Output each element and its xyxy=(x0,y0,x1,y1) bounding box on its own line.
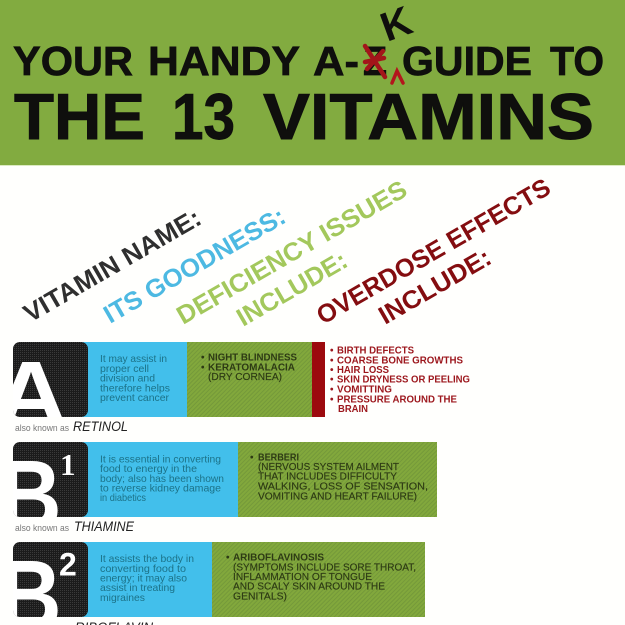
deficiency text B2 xyxy=(226,553,416,603)
heading: overdose include: INCLUDE: xyxy=(374,243,496,330)
letter tile B1: 1 xyxy=(60,447,76,482)
good panel xyxy=(80,442,238,517)
heading: vitamin name: VITAMIN NAME: xyxy=(19,204,206,328)
good text B1 xyxy=(100,454,224,504)
deficiency text B1 xyxy=(250,452,428,502)
title line one: Z xyxy=(363,38,387,84)
deficiency text B1: VOMITING AND HEART FAILURE) xyxy=(258,491,417,502)
heading: deficiency include: INCLUDE: xyxy=(232,246,353,332)
good panel xyxy=(80,542,212,617)
deficiency text B2: (SYMPTOMS INCLUDE SORE THROAT, xyxy=(233,562,416,573)
also known as thiamine xyxy=(15,518,135,534)
good text B1: in diabetics xyxy=(100,493,146,504)
good text A: prevent cancer xyxy=(100,393,170,404)
row: vitamin B1 xyxy=(13,442,437,531)
title line one xyxy=(13,38,604,84)
good text B1: body; also has been shown xyxy=(100,474,224,485)
letter tile B1 xyxy=(13,442,88,517)
also known as retinol: RETINOL xyxy=(73,418,128,434)
title line two: 13 xyxy=(172,80,235,153)
good text A: division and xyxy=(100,374,155,384)
deficiency text B2: INFLAMMATION OF TONGUE xyxy=(233,572,372,583)
overdose text A: SKIN DRYNESS OR PEELING xyxy=(337,375,470,386)
deficiency text B2: GENITALS) xyxy=(233,592,287,603)
column headings xyxy=(19,173,555,332)
overdose text A: • xyxy=(330,375,334,386)
title line one: A- xyxy=(313,38,359,84)
overdose text A: BRAIN xyxy=(338,404,368,415)
deficiency text B2: • xyxy=(226,553,230,564)
overdose text A: • xyxy=(330,346,334,356)
deficiency panel xyxy=(187,342,312,417)
deficiency text B2: ARIBOFLAVINOSIS xyxy=(233,553,324,564)
deficiency panel xyxy=(212,542,425,617)
good text B2 xyxy=(100,554,194,604)
letter tile A xyxy=(13,342,88,417)
deficiency text A: NIGHT BLINDNESS xyxy=(208,352,297,364)
also known as thiamine: THIAMINE xyxy=(74,518,135,534)
deficiency text B1: THAT INCLUDES DIFFICULTY xyxy=(258,472,397,483)
overdose text A: VOMITTING xyxy=(337,384,392,395)
letter tile B2 xyxy=(13,542,88,617)
also known as retinol xyxy=(15,418,128,434)
good text B2: energy; it may also xyxy=(100,574,187,584)
title line two: VITAMINS xyxy=(263,80,594,153)
heading: overdose effects: OVERDOSE EFFECTS xyxy=(312,173,555,330)
header banner xyxy=(0,0,625,165)
overdose text A: COARSE BONE GROWTHS xyxy=(337,355,463,366)
good text B2: assist in treating xyxy=(100,583,175,594)
red strike over Z xyxy=(365,46,385,77)
overdose text A: • xyxy=(330,394,334,405)
overdose text A: • xyxy=(330,355,334,366)
red caret xyxy=(392,71,403,83)
letter tile B1: B xyxy=(0,439,62,551)
overdose text A: • xyxy=(330,365,334,376)
deficiency text B1: (NERVOUS SYSTEM AILMENT xyxy=(258,462,399,473)
good text B1: It is essential in converting xyxy=(100,454,221,466)
good text B1: food to energy in the xyxy=(100,464,197,475)
good text B2: converting food to xyxy=(100,564,186,575)
deficiency text A: • xyxy=(201,352,205,364)
row: vitamin B2 xyxy=(0,539,425,625)
overdose text A xyxy=(330,346,470,415)
good text A xyxy=(100,354,170,404)
title line one: GUIDE xyxy=(402,38,532,84)
good text B2: migraines xyxy=(100,593,145,604)
heading: its goodness: ITS GOODNESS: xyxy=(99,202,291,329)
also known as thiamine: also known as xyxy=(15,523,69,534)
deficiency text A: • xyxy=(201,362,205,374)
overdose text A: PRESSURE AROUND THE xyxy=(337,394,457,405)
title line one: YOUR xyxy=(13,38,133,84)
deficiency text B1: • xyxy=(250,452,254,464)
also known as retinol: also known as xyxy=(15,423,69,434)
deficiency text A: (DRY CORNEA) xyxy=(208,372,282,383)
good text A: therefore helps xyxy=(100,384,170,394)
overdose text A: • xyxy=(330,384,334,395)
overdose bar xyxy=(312,342,325,417)
title line one: TO xyxy=(550,38,604,84)
deficiency text A xyxy=(201,352,297,383)
good panel xyxy=(80,342,187,417)
good text A: proper cell xyxy=(100,364,149,375)
good text B1: to reverse kidney damage xyxy=(100,484,221,494)
row: vitamin A xyxy=(13,342,470,431)
title line one: HANDY xyxy=(148,38,300,84)
title line two: THE xyxy=(14,80,145,153)
deficiency panel xyxy=(238,442,437,517)
good text A: It may assist in xyxy=(100,354,167,365)
deficiency text A: KERATOMALACIA xyxy=(208,362,295,374)
deficiency text B2: AND SCALY SKIN AROUND THE xyxy=(233,582,385,593)
deficiency text B1: WALKING, LOSS OF SENSATION, xyxy=(258,481,428,492)
title line two xyxy=(14,80,594,153)
deficiency text B1: BERBERI xyxy=(258,452,299,464)
overdose text A: HAIR LOSS xyxy=(337,365,389,376)
letter tile B2: 2 xyxy=(59,546,77,582)
heading: deficiency issues: DEFICIENCY ISSUES xyxy=(172,175,412,330)
overdose text A: BIRTH DEFECTS xyxy=(337,346,414,356)
good text B2: It assists the body in xyxy=(100,554,194,565)
